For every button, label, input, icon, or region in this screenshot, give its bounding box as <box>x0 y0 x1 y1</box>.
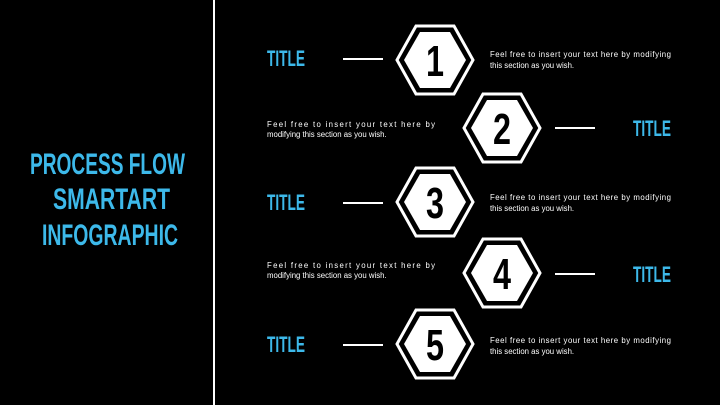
step 4: 4 <box>493 250 511 299</box>
step 5: 5 <box>426 321 444 370</box>
step 5 <box>267 310 671 378</box>
step 1: 1 <box>426 37 444 86</box>
heading: INFOGRAPHIC <box>42 219 178 252</box>
step 4: TITLE <box>633 262 671 287</box>
step 2: TITLE <box>633 116 671 141</box>
step 4 <box>267 239 671 307</box>
step 1 <box>267 26 671 94</box>
heading <box>30 148 185 252</box>
step 4: Feel free to insert your text here by <box>267 261 435 270</box>
step 3: this section as you wish. <box>490 204 574 213</box>
step 5: this section as you wish. <box>490 347 574 356</box>
step 5: Feel free to insert your text here by modifying <box>490 336 671 345</box>
step 1: TITLE <box>267 46 305 71</box>
step 3: TITLE <box>267 190 305 215</box>
heading: PROCESS FLOW <box>30 148 185 181</box>
step 2: modifying this section as you wish. <box>267 130 387 139</box>
step 4: modifying this section as you wish. <box>267 271 387 280</box>
step 5: TITLE <box>267 332 305 357</box>
step 2: Feel free to insert your text here by <box>267 120 435 129</box>
heading: SMARTART <box>53 183 170 216</box>
step 3 <box>267 168 671 236</box>
step 3: 3 <box>426 179 444 228</box>
step 1: Feel free to insert your text here by modifying <box>490 50 671 59</box>
step 2: 2 <box>493 105 511 154</box>
step 3: Feel free to insert your text here by modifying <box>490 193 671 202</box>
step 1: this section as you wish. <box>490 61 574 70</box>
step 2 <box>267 94 671 162</box>
